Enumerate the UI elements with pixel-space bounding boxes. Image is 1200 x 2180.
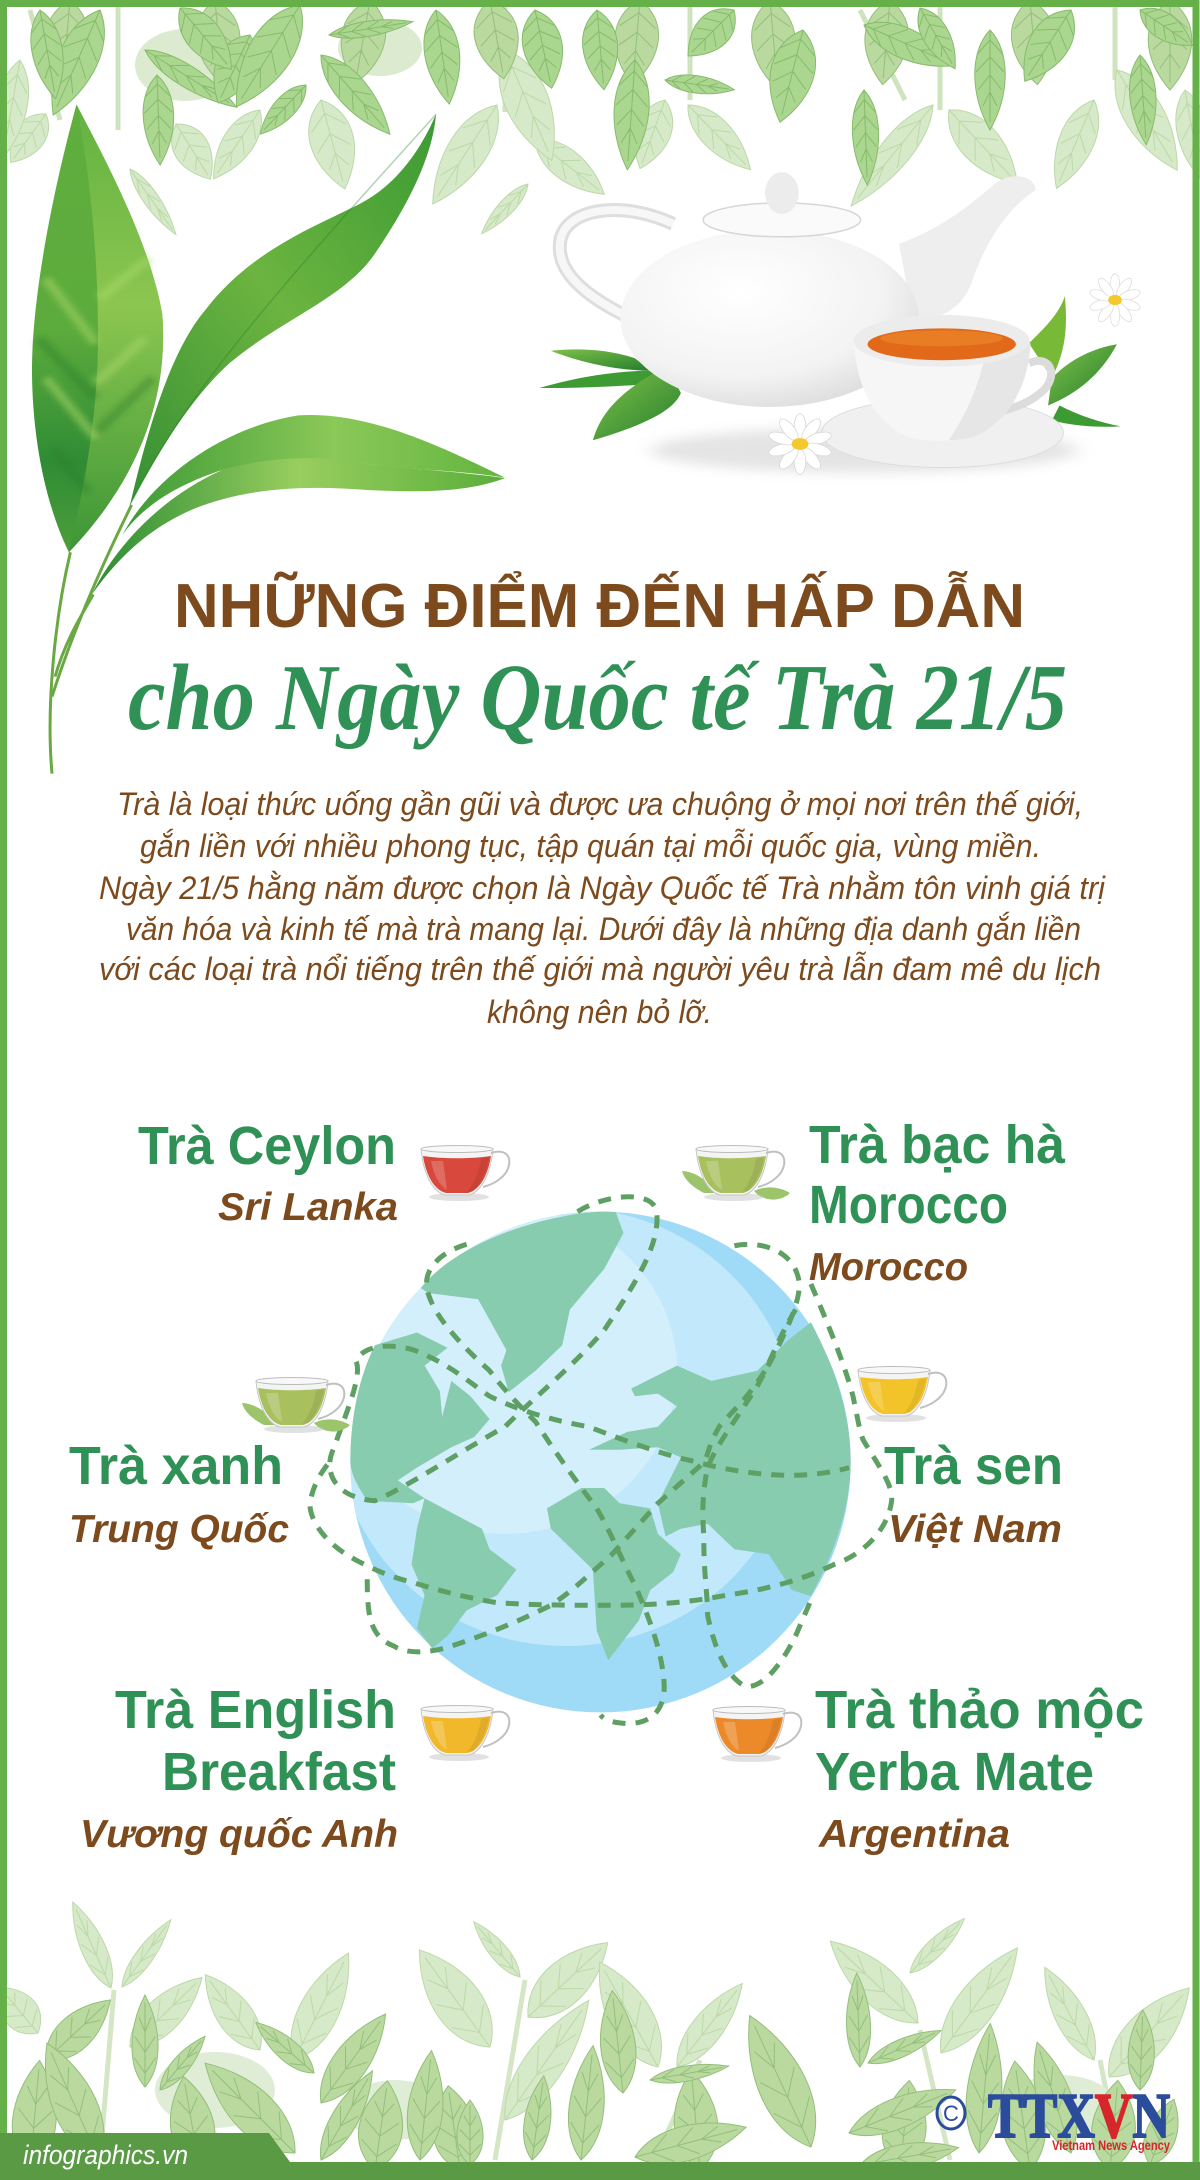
tea: Ceylon: Trà Ceylon xyxy=(138,1116,396,1176)
intro paragraph: Ngày 21/5 hằng năm được chọn là Ngày Quốc tế Trà nhằm tôn vinh giá trị xyxy=(99,870,1106,906)
teapot body xyxy=(620,230,919,407)
tea: English Breakfast: Vương quốc Anh xyxy=(80,1813,398,1856)
tea: mint Morocco: Trà bạc hà xyxy=(809,1115,1066,1175)
tea: green China: Trung Quốc xyxy=(69,1508,289,1551)
tea: green China xyxy=(69,1378,350,1551)
tea: herbal Yerba Mate: Argentina xyxy=(818,1813,1010,1856)
title line 2: cho Ngày Quốc tế Trà 21/5 xyxy=(128,646,1067,750)
teapot lid xyxy=(703,172,861,237)
intro paragraph: Trà là loại thức uống gần gũi và được ưa chuộng ở mọi nơi trên thế giới, xyxy=(117,786,1083,822)
large tea sprig xyxy=(32,104,505,774)
tea: green China: Trà xanh xyxy=(69,1436,283,1496)
tea: herbal Yerba Mate: Yerba Mate xyxy=(815,1742,1094,1802)
intro paragraph: văn hóa và kinh tế mà trà mang lại. Dưới đây là những địa danh gắn liền xyxy=(126,911,1081,947)
tea: mint Morocco: Morocco xyxy=(809,1175,1008,1235)
tea: herbal Yerba Mate: Trà thảo mộc xyxy=(815,1680,1144,1740)
intro paragraph xyxy=(99,786,1106,1030)
tea: English Breakfast xyxy=(80,1680,509,1856)
leaf: horizontal xyxy=(92,415,505,595)
tea: lotus Vietnam: Việt Nam xyxy=(888,1508,1062,1551)
footer bar with site name: infographics.vn xyxy=(23,2140,188,2170)
teacup xyxy=(854,315,1051,441)
copyright mark xyxy=(937,2097,965,2129)
tea: lotus Vietnam xyxy=(858,1366,1063,1551)
copyright mark: C xyxy=(943,2101,959,2126)
land masses xyxy=(350,1212,851,1660)
teapot spout xyxy=(899,176,1036,323)
top foliage canopy xyxy=(0,0,1200,239)
intro paragraph: gắn liền với nhiều phong tục, tập quán tại mỗi quốc gia, vùng miền. xyxy=(140,828,1041,864)
cup: lotus tea xyxy=(858,1366,946,1422)
tea: English Breakfast: Trà English xyxy=(115,1680,396,1740)
leaves behind the teapot xyxy=(539,296,1121,440)
teacup saucer xyxy=(822,398,1063,468)
cup: green tea xyxy=(242,1378,350,1433)
tea: Ceylon xyxy=(138,1116,509,1229)
TTXVN logo: TTXVN xyxy=(988,2080,1170,2151)
bottom foliage xyxy=(0,1897,1200,2178)
globe with routes xyxy=(310,1197,892,1724)
tea: mint Morocco xyxy=(682,1115,1066,1289)
daisy flowers xyxy=(767,274,1142,474)
title line 1: NHỮNG ĐIỂM ĐẾN HẤP DẪN xyxy=(174,572,1025,641)
leaf: upright xyxy=(32,104,163,552)
cup: red tea xyxy=(421,1146,509,1201)
tea: lotus Vietnam: Trà sen xyxy=(884,1436,1063,1496)
dashed routes xyxy=(310,1197,892,1724)
cup: Yerba Mate xyxy=(713,1706,801,1762)
cup: mint tea xyxy=(682,1146,790,1201)
intro paragraph: không nên bỏ lỡ. xyxy=(487,994,712,1030)
tea: mint Morocco: Morocco xyxy=(809,1246,968,1289)
illustration: teapot and cup xyxy=(539,172,1142,474)
tea: Ceylon: Sri Lanka xyxy=(218,1186,398,1229)
teapot handle xyxy=(560,210,673,318)
title xyxy=(128,572,1067,750)
footer bar with site name xyxy=(0,2133,1200,2180)
leaf: diagonal xyxy=(130,114,436,505)
intro paragraph: với các loại trà nổi tiếng trên thế giới mà người yêu trà lẫn đam mê du lịch xyxy=(99,951,1101,987)
tea: English Breakfast: Breakfast xyxy=(162,1742,396,1802)
cup: English Breakfast xyxy=(421,1706,509,1761)
tea: herbal Yerba Mate xyxy=(713,1680,1144,1856)
TTXVN logo: Vietnam News Agency xyxy=(1052,2137,1170,2153)
